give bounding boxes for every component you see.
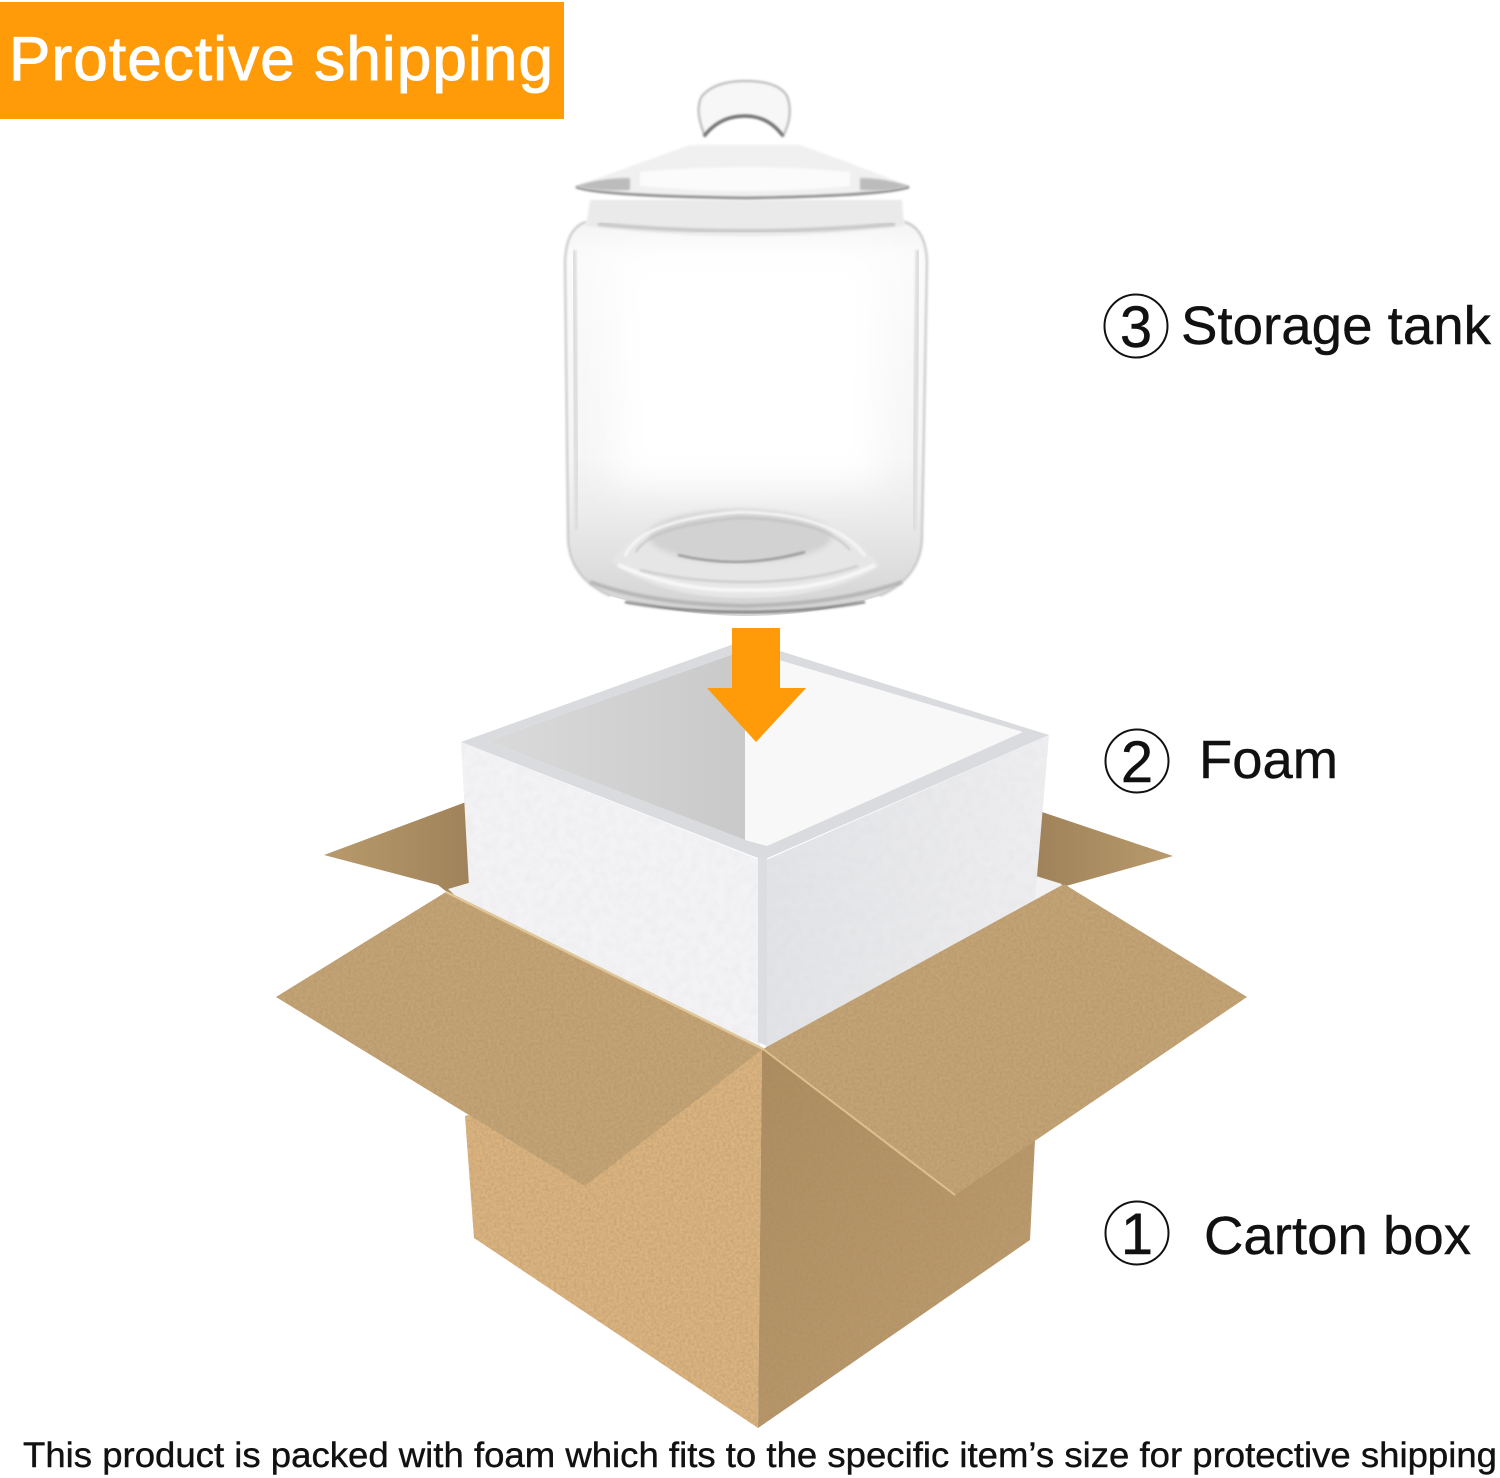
label: carton box: 1	[1121, 1202, 1153, 1267]
label: storage tank: 3	[1120, 295, 1152, 360]
label: foam: Foam	[1199, 730, 1338, 790]
footer note: This product is packed with foam which fits to the specific item’s size for protective shipping	[23, 1436, 1497, 1475]
illustration: glass storage jar	[565, 81, 927, 616]
jar neck	[586, 200, 904, 236]
title banner	[0, 2, 564, 119]
jar knob	[699, 81, 790, 136]
foam front left wall	[461, 742, 760, 1050]
label: storage tank: Storage tank	[1181, 296, 1492, 356]
illustration: foam insert	[461, 640, 1049, 1050]
foam corner edge	[758, 858, 767, 1046]
title banner: Protective shipping	[9, 25, 553, 94]
foam rim	[461, 640, 1049, 860]
illustration: carton box body	[276, 884, 1247, 1428]
label: carton box	[1106, 1202, 1471, 1267]
jar centre highlight	[615, 250, 880, 485]
label: carton box: Carton box	[1204, 1206, 1471, 1266]
foam inner left wall	[487, 650, 745, 840]
jar bottom glass	[612, 508, 880, 598]
arrow: down into foam	[707, 628, 806, 742]
carton right front flap	[763, 884, 1247, 1195]
jar body	[565, 218, 927, 616]
label: foam	[1106, 730, 1338, 795]
foam front right wall	[766, 735, 1049, 1050]
foam inner right wall	[745, 650, 1023, 846]
illustration: carton box back flaps	[324, 802, 1173, 905]
label: foam: 2	[1121, 730, 1153, 795]
carton left front flap	[276, 892, 763, 1186]
jar side walls	[565, 222, 610, 596]
jar lid	[574, 145, 911, 198]
